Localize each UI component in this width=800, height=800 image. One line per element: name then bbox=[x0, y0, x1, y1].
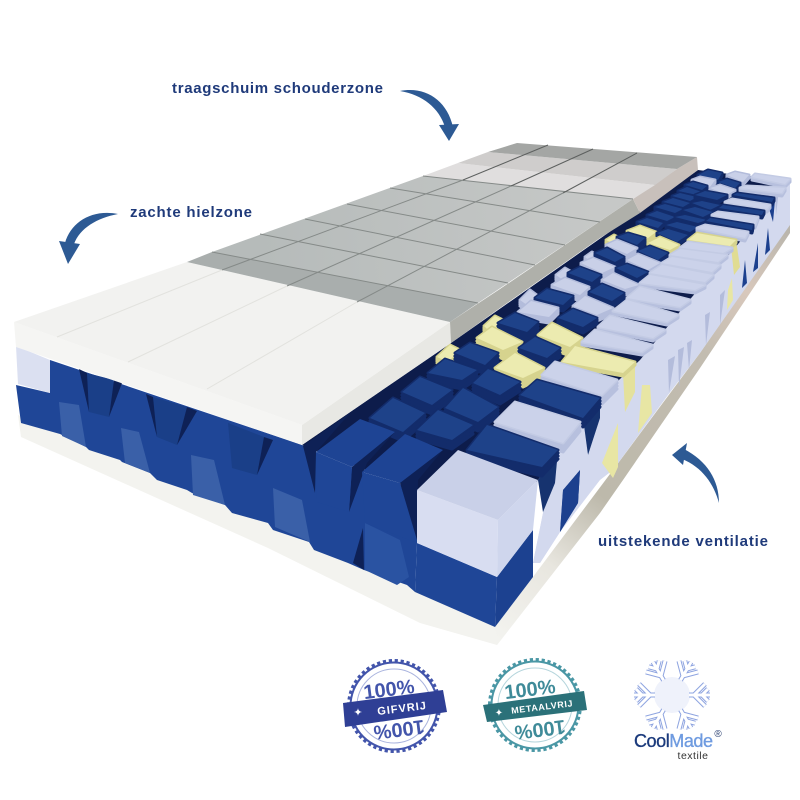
grey band bbox=[187, 252, 478, 322]
white front face bbox=[14, 322, 302, 445]
label: zachte hielzone: zachte hielzone bbox=[130, 204, 252, 221]
badge: gifvrij: GIFVRIJ bbox=[377, 700, 428, 718]
pale end block bbox=[16, 346, 50, 393]
shoulder side face bbox=[633, 157, 698, 213]
base layer bbox=[18, 223, 790, 645]
mattress bbox=[14, 143, 790, 645]
badge: gifvrij: ✦ bbox=[353, 706, 363, 719]
front corner block bbox=[415, 450, 538, 627]
logo: CoolMade textile: textile bbox=[678, 750, 708, 762]
outer column tops bbox=[562, 174, 790, 412]
grid lines bbox=[57, 145, 637, 389]
badge: gifvrij bbox=[343, 661, 447, 751]
logo: CoolMade textile: ® bbox=[714, 729, 722, 740]
arrow to heel zone bbox=[59, 213, 118, 264]
inner block column two, middle bbox=[558, 237, 679, 327]
side face yellow and navy inserts bbox=[560, 200, 775, 532]
badge: metaalvrij: METAALVRIJ bbox=[511, 698, 574, 716]
arrow to ventilation bbox=[672, 443, 719, 503]
inner block column one, middle bbox=[518, 226, 656, 317]
badge: metaalvrij: 100% bbox=[503, 676, 557, 704]
large navy block two bbox=[362, 434, 443, 543]
base side strip bbox=[495, 223, 790, 645]
icon: snowflake bbox=[634, 657, 710, 733]
outer column front tops bbox=[467, 362, 617, 563]
notch shadows bbox=[79, 369, 364, 570]
lighter lower blocks bbox=[59, 402, 409, 585]
top comfort layer bbox=[14, 143, 698, 445]
grey side face bbox=[450, 199, 640, 343]
front zigzag foam band bbox=[16, 346, 418, 592]
white side face bbox=[302, 322, 451, 445]
dark interior bbox=[302, 170, 790, 490]
large navy block one bbox=[316, 419, 395, 512]
back grey strip bbox=[488, 143, 697, 169]
label: traagschuim schouderzone: traagschuim schouderzone bbox=[172, 80, 383, 97]
badge: metaalvrij: ✦ bbox=[495, 708, 503, 719]
heel zone white top bbox=[14, 262, 450, 425]
badge: metaalvrij bbox=[483, 660, 587, 750]
darker upper notches bbox=[87, 373, 264, 475]
outer column side face bbox=[533, 179, 790, 563]
badge: metaalvrij: 100% bbox=[513, 715, 567, 743]
partly hidden inner blocks bbox=[437, 235, 620, 362]
inner block column one, back bbox=[637, 170, 722, 228]
side face wedges bbox=[668, 190, 779, 393]
label: uitstekende ventilatie: uitstekende ventilatie bbox=[598, 533, 768, 550]
inner block column two, back bbox=[657, 172, 749, 242]
badge: gifvrij: 100% bbox=[372, 715, 426, 743]
arrow to shoulder zone bbox=[400, 90, 459, 141]
badge: gifvrij: 100% bbox=[362, 676, 416, 704]
main grey zone bbox=[212, 176, 633, 303]
inner block column two, front bbox=[417, 323, 582, 440]
inner block column one, front bbox=[370, 313, 538, 432]
logo: CoolMade textile: CoolMade bbox=[634, 731, 713, 751]
shoulder zone pale front bbox=[423, 163, 655, 199]
shoulder zone pale back bbox=[458, 152, 677, 185]
logo: CoolMade textile bbox=[634, 729, 722, 762]
